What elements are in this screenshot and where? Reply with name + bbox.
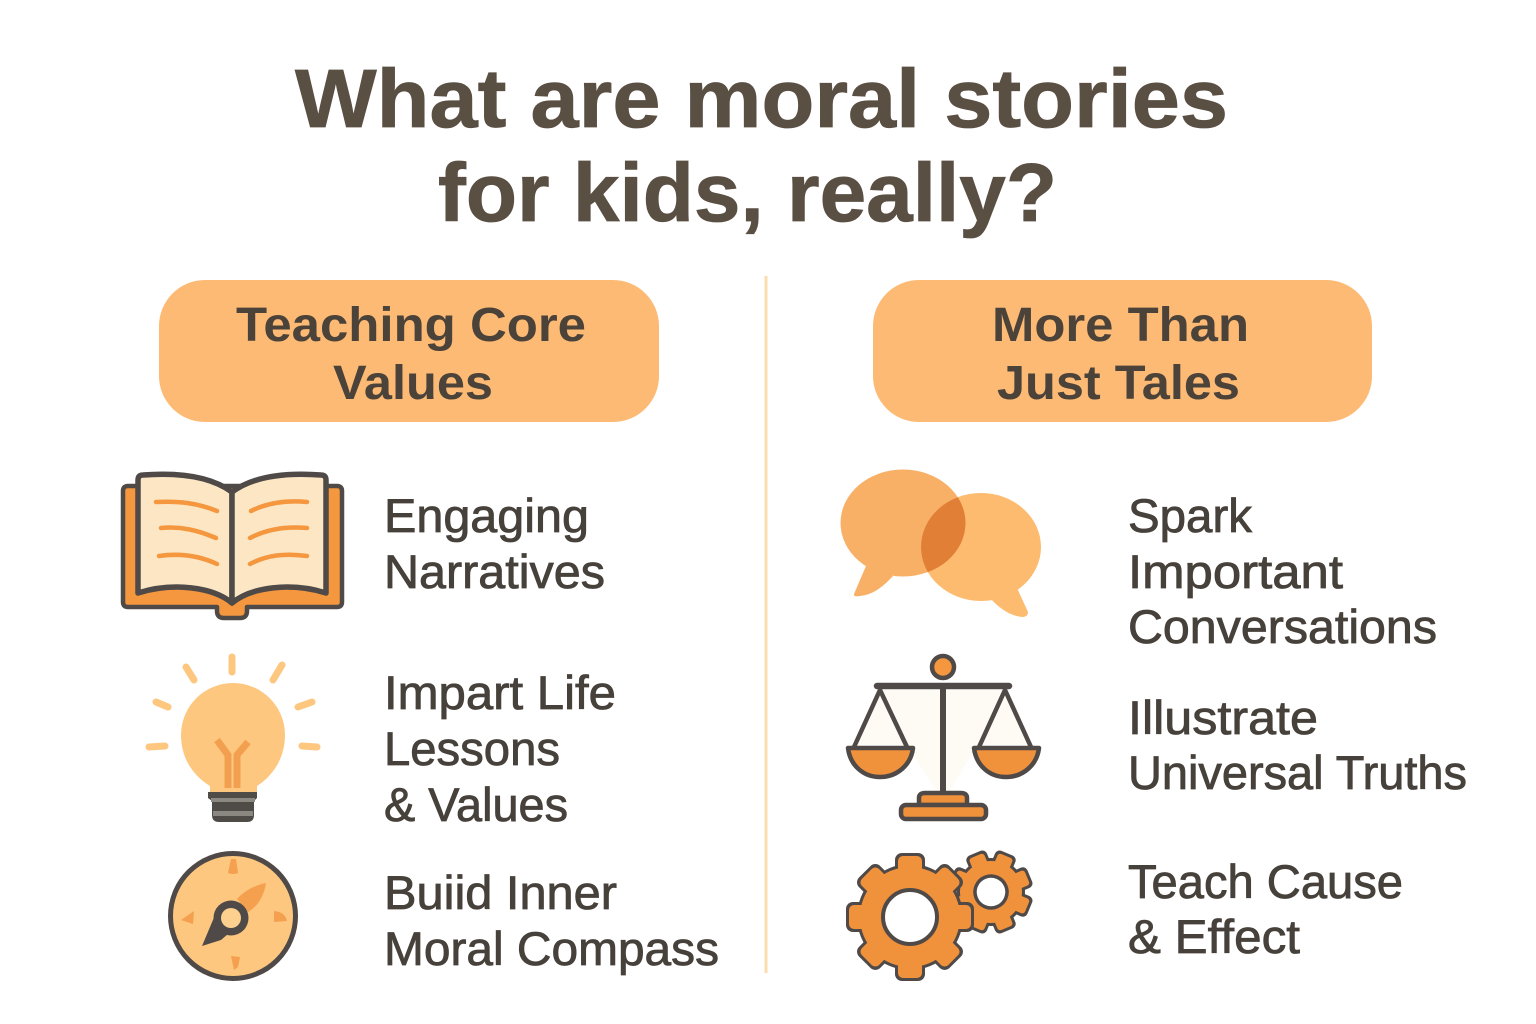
text: build inner moral compass	[384, 866, 719, 975]
icon: compass	[170, 854, 296, 978]
title: What are moral stories	[295, 52, 1228, 145]
panel: teaching core values header: Values	[333, 357, 493, 410]
icon: light bulb	[149, 657, 317, 822]
small gear	[936, 837, 1046, 947]
center divider	[764, 276, 768, 973]
text: spark important conversations	[1128, 489, 1437, 653]
text: spark important conversations: Spark	[1128, 489, 1253, 542]
icon: balance scale	[848, 656, 1039, 819]
text: illustrate universal truths	[1128, 691, 1467, 799]
text: impart life lessons and values: & Values	[384, 778, 568, 831]
text: teach cause and effect: Teach Cause	[1128, 855, 1403, 908]
text: impart life lessons and values: Lessons	[384, 722, 560, 775]
large gear	[846, 853, 974, 981]
text: spark important conversations: Important	[1128, 545, 1343, 598]
panel: more than just tales header: More Than	[992, 299, 1249, 352]
text: engaging narratives: Engaging	[384, 489, 589, 542]
panel: more than just tales header	[873, 280, 1372, 422]
icon: open book	[123, 474, 342, 618]
text: spark important conversations: Conversations	[1128, 600, 1437, 653]
text: engaging narratives	[384, 489, 605, 598]
text: impart life lessons and values: Impart Life	[384, 666, 616, 719]
text: impart life lessons and values	[384, 666, 616, 831]
text: build inner moral compass: Moral Compass	[384, 922, 719, 975]
text: teach cause and effect: & Effect	[1128, 910, 1300, 963]
title: for kids, really?	[438, 146, 1057, 239]
text: engaging narratives: Narratives	[384, 545, 605, 598]
text: build inner moral compass: Buiid Inner	[384, 866, 617, 919]
icon: speech bubbles	[840, 470, 1041, 617]
title	[295, 52, 1228, 239]
panel: teaching core values header: Teaching Core	[236, 299, 586, 352]
infographic canvas	[120, 66, 1466, 981]
text: illustrate universal truths: Illustrate	[1128, 691, 1318, 744]
icon: gears	[846, 837, 1046, 981]
text: teach cause and effect	[1128, 855, 1403, 963]
panel: teaching core values header	[159, 280, 659, 422]
text: illustrate universal truths: Universal Truths	[1128, 746, 1467, 799]
panel: more than just tales header: Just Tales	[997, 357, 1240, 410]
